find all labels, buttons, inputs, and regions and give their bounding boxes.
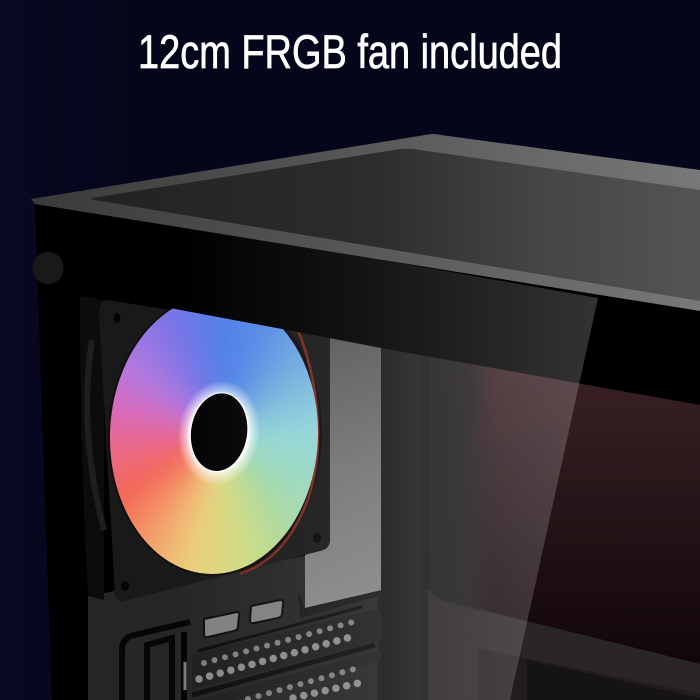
fan dark rim <box>103 290 327 580</box>
RGB fan <box>110 308 318 574</box>
panel shadow fade <box>429 355 500 618</box>
perforation rows <box>204 622 353 663</box>
title: 12cm FRGB fan included <box>138 25 562 78</box>
gray rear panel <box>305 335 382 608</box>
plate recess by gray panel <box>298 590 382 700</box>
side foot <box>32 252 64 284</box>
ventilation slot right <box>250 600 283 623</box>
fan screw holes <box>114 313 321 591</box>
rear ghost fan frame <box>80 296 104 600</box>
fan frame <box>99 300 330 601</box>
front top band <box>35 203 700 700</box>
lower drive bay <box>478 648 700 700</box>
rear fan blade arc <box>87 340 104 530</box>
glass reflection <box>180 224 598 700</box>
interior pillar <box>381 340 431 700</box>
red-lit panel <box>429 355 700 664</box>
bracket latch <box>122 622 190 700</box>
top panel bevel <box>31 134 700 311</box>
expansion slot covers <box>192 607 382 700</box>
hub glow <box>171 375 267 491</box>
hub <box>186 390 252 475</box>
ventilation slot left <box>204 612 239 637</box>
fan red edge <box>240 330 318 574</box>
back plate under fan <box>88 556 382 700</box>
fan colour wheel <box>74 261 354 609</box>
interior lower area <box>428 590 700 700</box>
case left black column <box>35 203 700 700</box>
top panel mesh <box>91 149 700 301</box>
